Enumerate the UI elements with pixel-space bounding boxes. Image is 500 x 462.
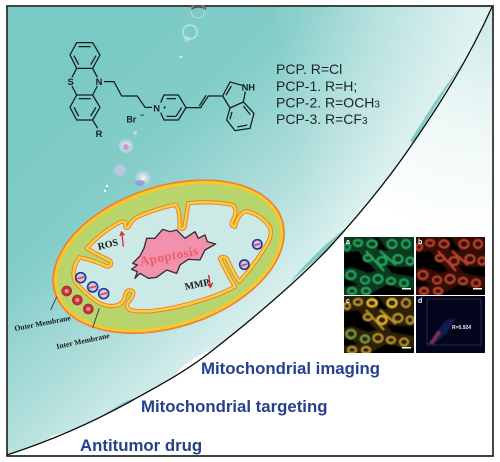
chemical structure: N <box>96 77 103 87</box>
compound list <box>276 61 380 127</box>
compound list: PCP-2. R=OCH3 <box>276 94 380 110</box>
mitochondrion <box>32 152 305 362</box>
blue vesicles <box>76 240 262 299</box>
chemical structure <box>68 43 255 139</box>
vesicle marks <box>77 244 260 295</box>
compound list: PCP. R=Cl <box>276 61 342 77</box>
apoptosis burst <box>132 229 216 278</box>
panel a: green channel <box>344 237 414 295</box>
curve accents <box>43 62 463 442</box>
red vesicles <box>62 286 93 314</box>
inner membrane with cristae <box>74 202 271 311</box>
panel c: merged channel: c <box>346 298 350 305</box>
chemical structure: NH <box>242 82 255 92</box>
panel b: red channel: b <box>418 239 422 246</box>
ROS label: ROS <box>97 237 120 253</box>
membrane leader lines <box>51 297 99 328</box>
label: mitochondrial targeting: Mitochondrial targeting <box>141 397 327 416</box>
label: mitochondrial imaging: Mitochondrial imaging <box>201 359 380 378</box>
chemical structure: S <box>68 77 74 87</box>
outer membrane <box>32 152 305 362</box>
panel d: colocalisation scatter: R=0.924 <box>452 325 471 331</box>
compound list: PCP-1. R=H; <box>276 78 357 94</box>
panel a: green channel: a <box>346 239 350 246</box>
panel b: red channel <box>416 237 486 295</box>
bubbles <box>104 4 206 192</box>
chemical structure: + <box>163 105 167 111</box>
microscopy panels <box>344 237 486 354</box>
label: antitumor drug: Antitumor drug <box>80 436 202 455</box>
panel d: colocalisation scatter <box>416 296 485 353</box>
apoptosis burst: Apoptosis <box>138 243 199 269</box>
outer membrane label: Outer Membrane <box>14 313 72 333</box>
panel c: merged channel <box>344 296 414 354</box>
chemical structure: Br <box>126 114 137 124</box>
ROS label <box>97 232 124 253</box>
chemical structure: − <box>140 110 144 119</box>
MMP label: MMP <box>184 277 210 293</box>
inter membrane label: Inter Membrane <box>56 331 111 351</box>
bonds <box>70 43 254 131</box>
chemical structure: R <box>96 129 103 139</box>
panel d: colocalisation scatter: d <box>418 298 422 305</box>
compound list: PCP-3. R=CF3 <box>276 111 368 127</box>
chemical structure: N <box>153 103 160 113</box>
